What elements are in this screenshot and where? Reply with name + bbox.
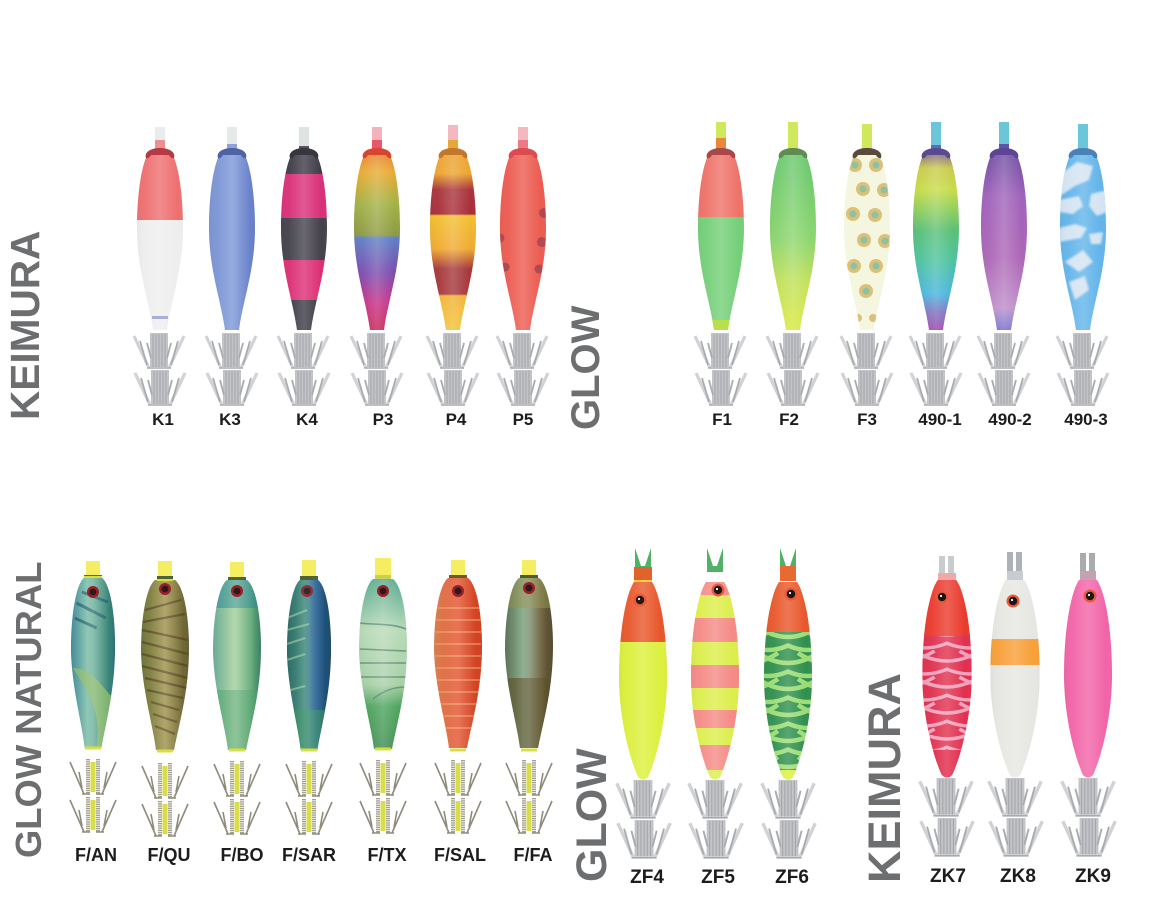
panel: GLOW top lures [691,122,1113,429]
lure ZF4 [613,548,673,888]
lure ZK8: ZK8 [1000,866,1036,887]
lure F/FA: F/FA [514,845,552,865]
panel: KEIMURA top lures [130,125,553,429]
lure P4: P4 [446,410,467,429]
lure F/AN: F/AN [75,845,117,865]
heading: GLOW top: GLOW [564,305,608,430]
heading: GLOW bottom: GLOW [568,748,616,882]
lure P3 [350,127,404,425]
lure 490-3 [1056,124,1110,425]
lure ZK9: ZK9 [1075,866,1111,887]
lure ZK9 [1058,553,1118,887]
lure F/SAL [434,560,486,862]
lure P3: P3 [373,410,393,429]
lure P5 [496,127,550,425]
lure ZK7 [916,556,978,887]
lure 490-3: 490-3 [1064,410,1108,429]
lure F/SAR: F/SAR [282,845,336,865]
panel: GLOW ZF lures [613,548,818,888]
lure K1: K1 [152,410,174,429]
lure 490-2: 490-2 [988,410,1032,429]
lure F/BO [213,562,263,862]
lure ZF6 [758,548,818,888]
lure K4: K4 [296,410,318,429]
lure ZF6: ZF6 [775,867,809,888]
lure F2 [766,122,820,425]
lure 490-2 [974,122,1034,429]
lure F/FA [505,560,553,862]
lure P5: P5 [513,410,533,429]
heading: KEIMURA top: KEIMURA [2,231,48,420]
lure F1 [694,122,748,425]
lure F/SAR [281,560,337,865]
lure F/BO: F/BO [220,845,264,865]
lure K1 [132,127,186,425]
lure F3 [840,124,894,425]
lure F/TX [359,558,407,862]
lure F/TX: F/TX [368,845,406,865]
panel: GLOW NATURAL lures [65,558,559,865]
lure K3: K3 [219,410,241,429]
lure F1: F1 [712,410,732,429]
lure F/AN [69,561,117,862]
lure F2: F2 [779,410,799,429]
lure 490-1: 490-1 [918,410,962,429]
heading: GLOW NATURAL: GLOW NATURAL [8,562,49,858]
lure P4 [426,125,480,425]
lure F/QU [141,561,190,865]
lure F3: F3 [857,410,877,429]
lure ZK8 [984,552,1046,887]
lure ZF4: ZF4 [630,867,664,888]
lure ZK7: ZK7 [930,866,966,887]
lure F/SAL: F/SAL [434,845,486,865]
heading: KEIMURA bottom: KEIMURA [859,673,910,883]
panel: KEIMURA ZK lures [916,552,1118,887]
lure 490-1 [908,122,962,425]
lure K4 [276,127,330,425]
lure ZF5 [685,548,745,888]
lure ZF5: ZF5 [701,867,735,888]
lure F/QU: F/QU [148,845,190,865]
lure K3 [204,127,258,425]
